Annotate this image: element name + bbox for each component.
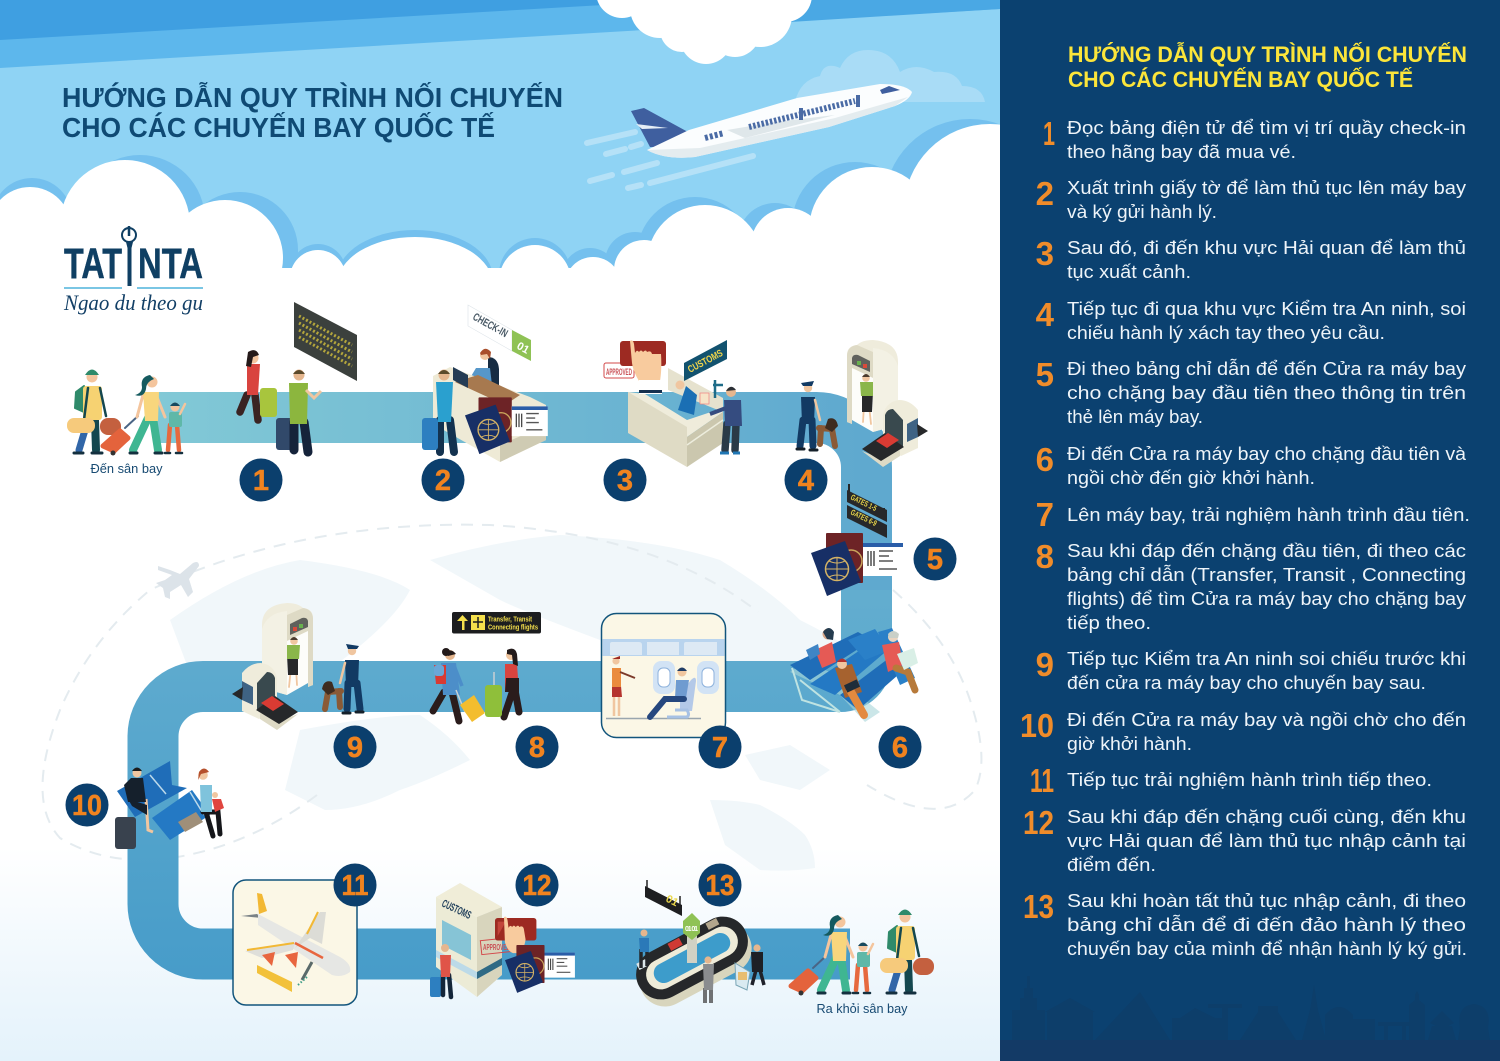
scene 2: check-in counter: 01	[515, 340, 531, 357]
label: exit: Ra khỏi sân bay	[816, 1002, 908, 1016]
step 10: Đi đến Cửa ra máy bay và ngồi chờ cho đến	[1067, 710, 1466, 730]
scene 3: customs counter: CUSTOMS	[686, 348, 725, 376]
step 10: giờ khởi hành.	[1067, 734, 1192, 754]
airplane illustration	[631, 84, 912, 158]
step 4: Tiếp tục đi qua khu vực Kiểm tra An ninh, soi	[1067, 299, 1466, 319]
title: CHO CÁC CHUYẾN BAY QUỐC TẾ	[62, 111, 495, 143]
step 5: cho chặng bay đầu tiên theo thông tin trên	[1067, 383, 1466, 403]
logo TATINTA: NTA	[138, 240, 203, 288]
badge 13	[698, 864, 742, 906]
badge 12	[516, 864, 558, 906]
step 4: chiếu hành lý xách tay theo yêu cầu.	[1067, 323, 1385, 343]
dashed flight route	[42, 525, 981, 860]
step 2: 2	[1036, 175, 1054, 212]
scene 9: security mirrored	[232, 603, 363, 730]
step 8: Sau khi đáp đến chặng đầu tiên, đi theo các	[1067, 541, 1466, 561]
panel: instructions	[1000, 0, 1500, 1061]
scene 2: check-in counter	[422, 305, 548, 462]
step 3: Sau đó, đi đến khu vực Hải quan để làm thủ	[1067, 238, 1466, 258]
top cloud	[596, 0, 812, 64]
panel heading	[1068, 41, 1467, 92]
icon: small airplane on route	[156, 562, 199, 599]
step 7	[1036, 496, 1470, 533]
step 8	[1036, 538, 1466, 633]
skyline silhouette	[1012, 976, 1490, 1040]
step 13: Sau khi hoàn tất thủ tục nhập cảnh, đi theo	[1067, 891, 1466, 911]
badge 1	[240, 458, 282, 502]
plane speed lines	[587, 132, 753, 188]
scene 6: waiting seats with passengers	[790, 628, 918, 722]
step 1: 1	[1043, 115, 1055, 152]
arrivals family	[67, 370, 185, 456]
step 9: 9	[1036, 646, 1054, 683]
step 7: 7	[1036, 496, 1054, 533]
scene 8: transfer sign and passengers	[433, 612, 541, 722]
step 2: Xuất trình giấy tờ để làm thủ tục lên máy bay	[1067, 178, 1466, 198]
badge 10: 10	[72, 790, 102, 822]
badge 6: 6	[892, 732, 908, 764]
step 7: Lên máy bay, trải nghiệm hành trình đầu tiên.	[1067, 505, 1470, 525]
badge 9: 9	[347, 732, 363, 764]
badge 3	[604, 458, 646, 502]
badge 4: 4	[798, 465, 814, 497]
scene 3: customs counter: APPROVED	[606, 367, 632, 378]
badge 4	[784, 458, 828, 502]
step 1: theo hãng bay đã mua vé.	[1067, 142, 1296, 162]
badge 2	[422, 458, 464, 502]
scene 1: departure board and passengers	[240, 302, 357, 452]
step 8: 8	[1036, 538, 1054, 575]
scene 5: gate signs and documents: GATES 6-9	[849, 508, 879, 528]
panel: scene 11 aircraft at gate	[233, 880, 357, 1005]
step 8: tiếp theo.	[1067, 613, 1151, 633]
scene 5: gate signs and documents: GATES 1-5	[849, 493, 879, 513]
badge 7	[698, 726, 742, 768]
step 12: 12	[1023, 804, 1054, 841]
step 12	[1023, 804, 1466, 875]
logo TATINTA	[63, 226, 203, 315]
scene 8: transfer sign and passengers: Transfer, Transit	[488, 616, 533, 624]
step 13: 13	[1023, 888, 1054, 925]
step 8: bảng chỉ dẫn (Transfer, Transit , Connecting	[1067, 564, 1466, 585]
panel: scene 7 in-flight cabin	[602, 614, 726, 738]
step 9: Tiếp tục Kiểm tra An ninh soi chiếu trước khi	[1067, 649, 1466, 669]
scene 2: check-in counter: CHECK-IN	[471, 311, 510, 340]
panel heading: CHO CÁC CHUYẾN BAY QUỐC TẾ	[1068, 66, 1413, 92]
step 13: chuyến bay của mình để nhận hành lý ký gửi.	[1067, 939, 1467, 959]
scene 12: immigration booth: APPROVED	[483, 943, 510, 952]
step 11: Tiếp tục trải nghiệm hành trình tiếp theo.	[1067, 770, 1432, 790]
route path first leg	[155, 417, 867, 600]
panel heading: HƯỚNG DẪN QUY TRÌNH NỐI CHUYẾN	[1068, 41, 1467, 67]
step 12: vực Hải quan để làm thủ tục nhập cảnh tại	[1067, 831, 1466, 851]
badge 10	[66, 784, 108, 826]
step 2	[1036, 175, 1466, 222]
scene 8: transfer sign and passengers: Connecting flights	[488, 624, 538, 632]
step 12: điểm đến.	[1067, 855, 1156, 875]
badge 8: 8	[529, 732, 545, 764]
scene 13: baggage carousel: 01 01	[685, 926, 698, 933]
scene 3: customs counter	[604, 340, 742, 467]
step 13	[1023, 888, 1467, 959]
badge 2: 2	[435, 465, 451, 497]
title	[62, 81, 563, 143]
badge 1: 1	[253, 465, 269, 497]
step 6: Đi đến Cửa ra máy bay cho chặng đầu tiên và	[1067, 444, 1467, 464]
scene 13: baggage carousel: 01	[664, 893, 680, 909]
step 1	[1043, 115, 1466, 162]
badge 9	[334, 726, 376, 768]
badge 5	[914, 538, 956, 580]
step 3	[1036, 235, 1466, 282]
scene 5: gate signs and documents	[811, 484, 903, 596]
badge 3: 3	[617, 465, 633, 497]
step 6	[1036, 441, 1467, 488]
badge 5: 5	[927, 544, 943, 576]
badge 6	[878, 726, 922, 768]
departing family	[791, 910, 934, 996]
title: HƯỚNG DẪN QUY TRÌNH NỐI CHUYẾN	[62, 81, 563, 113]
scene 12: immigration booth	[430, 883, 575, 997]
badge 8	[516, 726, 558, 768]
step 1: Đọc bảng điện tử để tìm vị trí quầy check-in	[1067, 118, 1466, 138]
step 9: đến cửa ra máy bay cho chuyến bay sau.	[1067, 673, 1426, 693]
badge 11: 11	[342, 870, 368, 902]
step 10	[1020, 707, 1466, 754]
step 3: 3	[1036, 235, 1054, 272]
badge 12: 12	[522, 870, 552, 902]
step 11: 11	[1030, 762, 1054, 799]
step 10: 10	[1020, 707, 1054, 744]
scene 10: waiting seats	[115, 761, 224, 849]
white cloud bank and lower background	[0, 124, 1076, 1061]
badge 13: 13	[706, 870, 734, 902]
sky background	[0, 0, 1000, 400]
label: arrival: Đến sân bay	[90, 462, 163, 476]
route path remaining legs	[153, 590, 867, 954]
step 11	[1030, 762, 1432, 799]
step 6: 6	[1036, 441, 1054, 478]
step 8: flights) để tìm Cửa ra máy bay cho chặng bay	[1067, 589, 1466, 609]
step 12: Sau khi đáp đến chặng cuối cùng, đến khu	[1067, 807, 1466, 827]
scene 12: immigration booth: CUSTOMS	[440, 898, 473, 922]
step 5: 5	[1036, 356, 1054, 393]
step 5: thẻ lên máy bay.	[1067, 407, 1203, 427]
cloud shadows	[0, 119, 1056, 326]
step 13: bảng chỉ dẫn để đi đến đảo hành lý theo	[1067, 914, 1466, 935]
step 4: 4	[1036, 296, 1055, 333]
step 6: ngồi chờ đến giờ khởi hành.	[1067, 468, 1315, 488]
scene 4: security gate and officer with dog	[797, 340, 928, 467]
step 2: và ký gửi hành lý.	[1067, 202, 1217, 222]
badge 11	[334, 864, 376, 906]
step 4	[1036, 296, 1466, 343]
logo TATINTA: Ngao du theo gu	[63, 290, 203, 315]
logo TATINTA: TAT	[64, 240, 122, 288]
step 5	[1036, 356, 1466, 427]
badge 7: 7	[712, 732, 728, 764]
faint background cloud	[795, 50, 985, 102]
world map background	[170, 535, 850, 871]
scene 13: baggage carousel	[627, 880, 764, 1015]
step 3: tục xuất cảnh.	[1067, 262, 1191, 282]
step 9	[1036, 646, 1466, 693]
step 5: Đi theo bảng chỉ dẫn để đến Cửa ra máy bay	[1067, 358, 1466, 379]
